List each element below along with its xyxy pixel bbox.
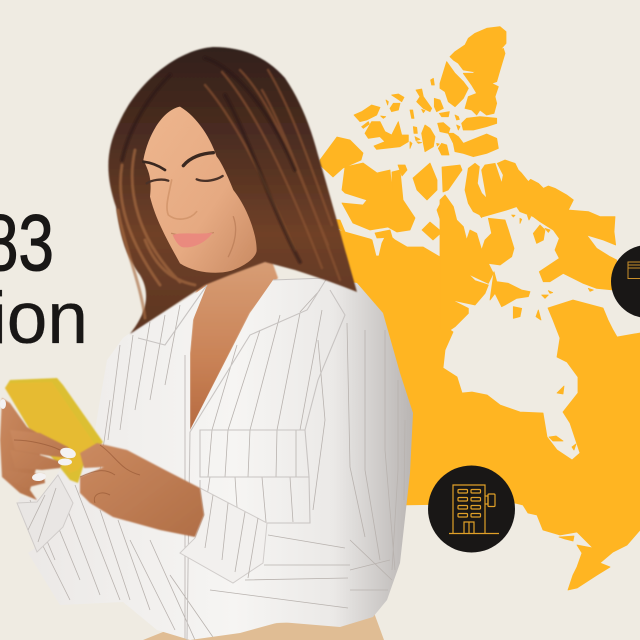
hand on left	[0, 398, 72, 500]
hair highlights	[118, 58, 340, 318]
smaller Queen Elizabeth islands	[354, 78, 460, 155]
neck and chest	[190, 250, 278, 432]
left cuff	[17, 475, 73, 552]
southern lake islands	[549, 386, 576, 541]
facial features	[143, 153, 236, 257]
trousers	[143, 610, 384, 640]
building line art	[449, 485, 499, 534]
Axel Heiberg Island	[440, 62, 468, 107]
islands of the inner archipelago	[320, 163, 462, 240]
card line art	[628, 262, 640, 278]
finger creases	[14, 440, 140, 503]
pocket and collar outlines	[138, 278, 345, 640]
Arctic archipelago	[354, 27, 506, 157]
hair behind face	[108, 47, 357, 334]
Baffin Island	[465, 160, 617, 290]
Devon Island	[462, 117, 497, 130]
face	[143, 107, 257, 273]
pinstripes	[30, 290, 405, 640]
western peninsula	[320, 137, 363, 177]
Baffin north island	[448, 133, 498, 157]
fingernails	[0, 399, 77, 482]
Kivalliq coast and northern islands	[440, 160, 617, 330]
Southampton Island	[490, 272, 530, 307]
map of Canada	[320, 27, 640, 590]
icon: card badge	[611, 245, 640, 318]
icon: hotel building badge	[428, 466, 515, 552]
right cuff	[180, 488, 267, 583]
left fingers	[3, 430, 72, 488]
Victoria Island	[342, 163, 415, 232]
Coats and small islands	[480, 215, 593, 320]
hand on right	[80, 443, 204, 537]
phone	[5, 378, 103, 483]
Ellesmere Island	[450, 27, 506, 115]
mainland	[320, 195, 640, 590]
headline figure	[0, 198, 88, 359]
lips	[173, 233, 213, 247]
woman holding a phone	[0, 47, 413, 640]
Melville Island	[365, 122, 408, 149]
Melville Peninsula	[440, 195, 514, 330]
shirt	[17, 278, 413, 640]
